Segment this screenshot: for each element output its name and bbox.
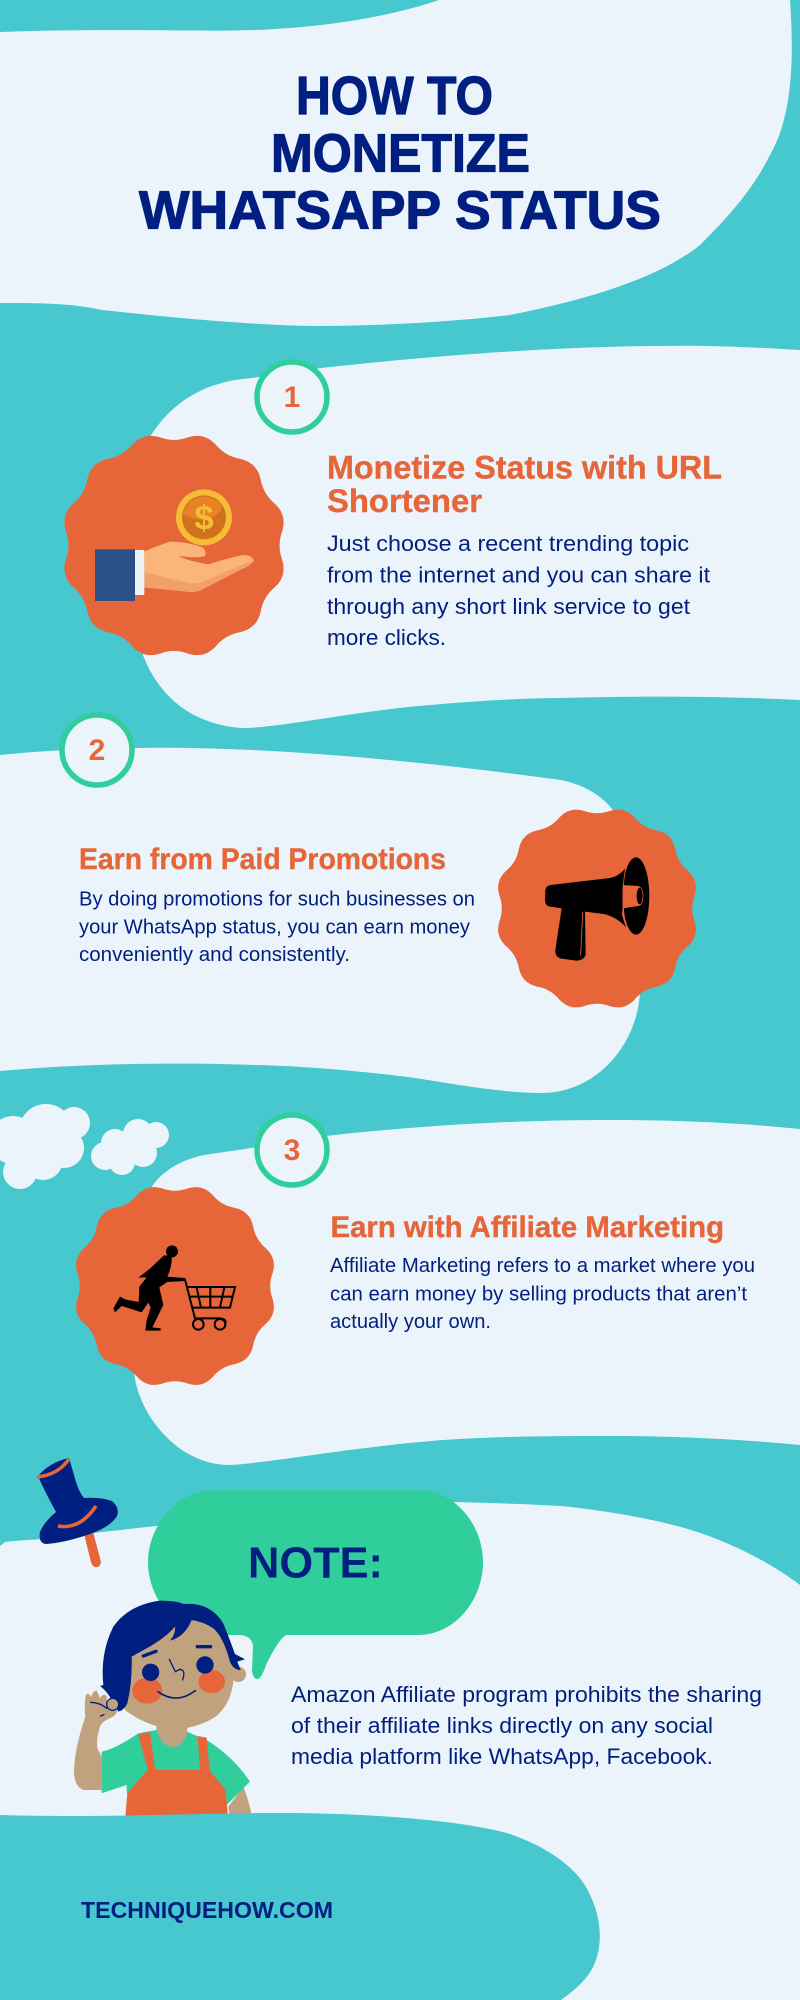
step 1 body: more clicks. xyxy=(327,625,446,650)
step 2 heading: Earn from Paid Promotions xyxy=(79,843,446,876)
number badge 2 xyxy=(62,715,132,785)
step 1 heading: Shortener xyxy=(327,483,482,519)
panel: step 3 xyxy=(76,1115,800,1465)
icon: hand with coin xyxy=(64,436,284,655)
footer blob xyxy=(0,1813,600,2000)
character: boy waving xyxy=(74,1601,252,1817)
icon: hand with coin: $ xyxy=(194,499,214,537)
footer website text: TECHNIQUEHOW.COM xyxy=(81,1897,333,1923)
note label: NOTE: xyxy=(248,1538,383,1588)
step 1 blob xyxy=(133,346,800,728)
note body text xyxy=(291,1682,762,1769)
note blob xyxy=(0,1502,800,2000)
note body text: Amazon Affiliate program prohibits the sharing xyxy=(291,1682,762,1707)
title: WHATSAPP STATUS xyxy=(139,180,661,240)
panel: step 1 xyxy=(64,346,800,728)
step 3 blob xyxy=(134,1120,800,1465)
number badge 1 xyxy=(257,362,327,432)
panel: note xyxy=(0,1458,800,2000)
note body text: media platform like WhatsApp, Facebook. xyxy=(291,1744,713,1769)
icon: push pin xyxy=(37,1458,118,1567)
step 1 body xyxy=(327,531,710,650)
panel: step 2 xyxy=(0,715,696,1093)
title blob xyxy=(0,0,792,326)
icon: megaphone xyxy=(498,810,696,1007)
step 2 blob xyxy=(0,748,640,1093)
note body text: of their affiliate links directly on any social xyxy=(291,1713,713,1738)
clouds xyxy=(0,1104,169,1189)
step 1 heading xyxy=(327,450,722,519)
step 1 body: Just choose a recent trending topic xyxy=(327,531,689,556)
step 3 body: can earn money by selling products that aren’t xyxy=(330,1284,747,1306)
speech bubble xyxy=(148,1490,483,1679)
number badge 3 xyxy=(257,1115,327,1185)
panel: title xyxy=(0,0,792,326)
step 2 body: conveniently and consistently. xyxy=(79,944,350,966)
step 2 body: your WhatsApp status, you can earn money xyxy=(79,916,470,938)
title xyxy=(139,66,661,240)
title: MONETIZE xyxy=(271,124,530,184)
step 1 body: through any short link service to get xyxy=(327,594,690,619)
step 3 heading: Earn with Affiliate Marketing xyxy=(330,1211,724,1244)
step 2 body: By doing promotions for such businesses on xyxy=(79,888,475,910)
step 3 body xyxy=(330,1255,755,1333)
title: HOW TO xyxy=(296,66,493,126)
number badge 3: 3 xyxy=(284,1134,300,1167)
step 3 body: Affiliate Marketing refers to a market where you xyxy=(330,1255,755,1277)
number badge 2: 2 xyxy=(89,734,105,767)
step 1 heading: Monetize Status with URL xyxy=(327,450,722,486)
panel: footer xyxy=(0,1813,600,2000)
step 2 body xyxy=(79,888,475,966)
step 3 body: actually your own. xyxy=(330,1311,491,1333)
number badge 1: 1 xyxy=(284,381,300,414)
icon: man running with cart xyxy=(76,1187,274,1385)
step 1 body: from the internet and you can share it xyxy=(327,562,710,588)
